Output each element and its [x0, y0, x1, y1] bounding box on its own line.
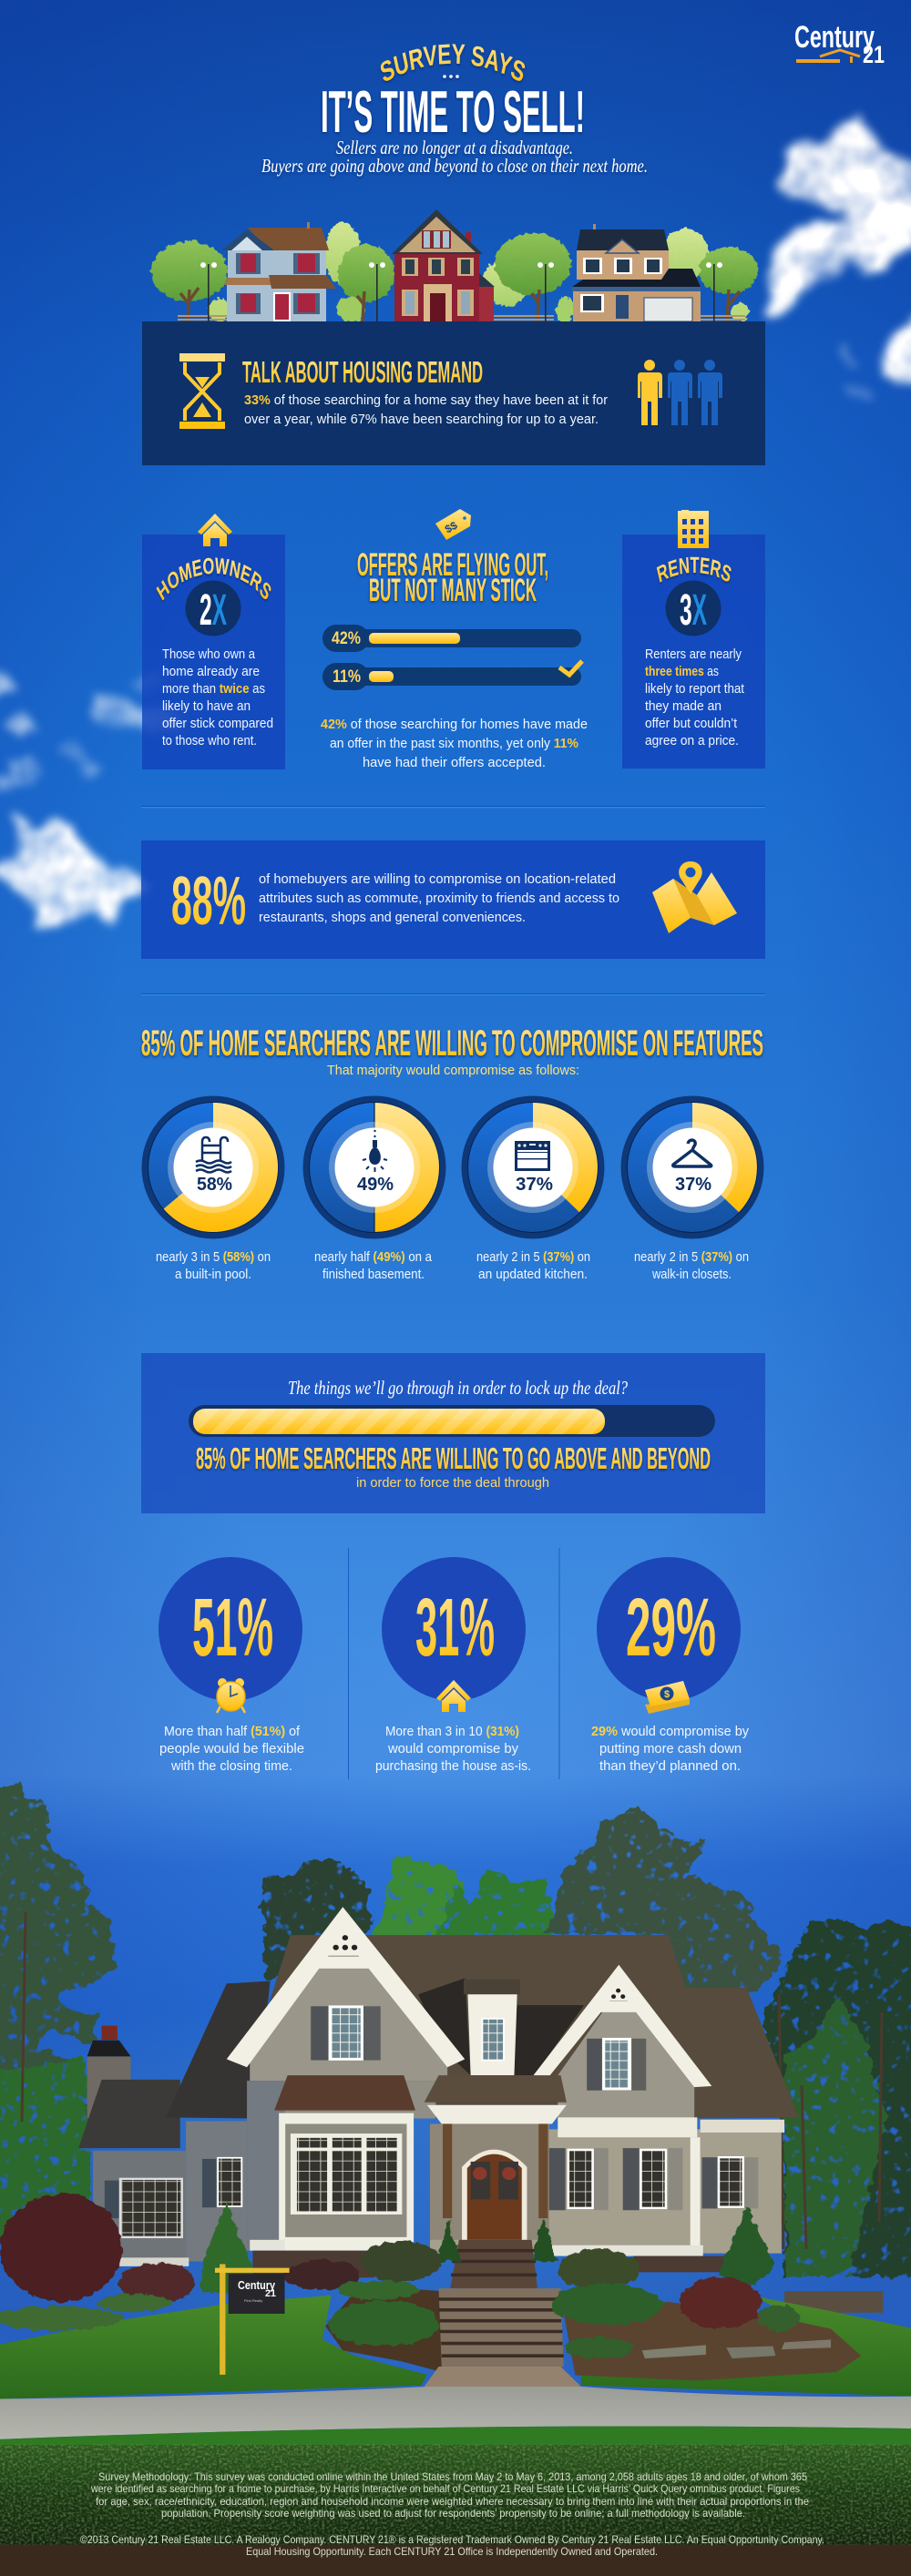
gables [227, 1907, 711, 2087]
icon: cash [645, 1681, 690, 1714]
text block: likely to report that [645, 682, 744, 697]
statistic: 88%: 88% [171, 862, 246, 939]
heading: homeowners: HOMEOWNERS [156, 557, 271, 603]
text block: restaurants, shops and general conveniences. [259, 911, 526, 925]
photo: tree trunks [22, 1912, 882, 2249]
text block: offer but couldn’t [645, 717, 737, 731]
captions: features: nearly 3 in 5 (58%) on [156, 1250, 271, 1265]
icon: oven [515, 1141, 550, 1171]
chimney [87, 2026, 131, 2119]
donut chart: 49% basement [302, 1096, 446, 1238]
subtitle: Buyers are going above and beyond to close on their next home. [261, 155, 648, 177]
text block [321, 718, 588, 770]
tan house [572, 224, 701, 321]
heading: features: That majority would compromise as follows: [327, 1064, 579, 1078]
panel: homeowners [142, 514, 285, 769]
captions: features: an updated kitchen. [478, 1268, 588, 1282]
subtitle: Sellers are no longer at a disadvantage. [336, 137, 573, 158]
text block: likely to have an [162, 699, 251, 714]
footer: copyright: Equal Housing Opportunity. Each CENTURY 21 Office is Independently Owned and Operated. [246, 2545, 658, 2558]
blue house [221, 222, 336, 321]
lower windows [105, 2148, 758, 2237]
stat: 31% as-is [375, 1557, 531, 1774]
donut chart: 37% closets [621, 1096, 763, 1238]
stat: 51% closing time [159, 1557, 304, 1774]
text block: 42% of those searching for homes have made [321, 718, 588, 732]
footer: survey methodology [90, 2470, 809, 2520]
badge: 3X: 3X [680, 586, 707, 635]
panel: housing demand [142, 321, 765, 465]
text block [591, 1725, 750, 1774]
street lamps [200, 262, 722, 321]
heading: survey says: SURVEY SAYS [379, 44, 527, 84]
hedge [0, 2445, 911, 2547]
fences [178, 315, 745, 321]
panel: above and beyond [141, 1353, 765, 1513]
donut chart: 58% pool [142, 1096, 284, 1238]
subtitle [261, 137, 648, 177]
text block: of homebuyers are willing to compromise on location-related [259, 872, 616, 887]
hedge texture [0, 2445, 911, 2547]
panel: offers: OFFERS ARE FLYING OUT, [357, 547, 548, 583]
heading: features [141, 1023, 763, 1078]
text block: three times as [645, 665, 719, 679]
red house [392, 209, 495, 321]
icon: three people [638, 360, 722, 425]
badge: 2X [186, 581, 241, 636]
text block: home already are [162, 665, 260, 679]
icon: price tag: $$ [443, 519, 460, 535]
captions: features [156, 1250, 749, 1282]
text block [244, 393, 608, 427]
text block: agree on a price. [645, 734, 739, 748]
shrubs [0, 2194, 799, 2358]
donut chart: 37% kitchen [461, 1096, 605, 1238]
sign text [238, 2278, 276, 2303]
icon: apartment building [678, 510, 709, 548]
icon: check mark [559, 661, 582, 675]
footer: copyright: ©2013 Century 21 Real Estate LLC. A Realogy Company. CENTURY 21® is a Registered Trademark Owned By Century 21 Real Estate LLC. An Equal Opportunity Company. [80, 2533, 824, 2546]
steps [425, 2240, 581, 2387]
text block: purchasing the house as-is. [375, 1759, 531, 1774]
icon: price tag [435, 509, 471, 540]
icon: house [198, 514, 232, 546]
text block: than they’d planned on. [599, 1759, 741, 1774]
icon: alarm clock [217, 1678, 245, 1713]
donut chart: 37% closets: 37% [675, 1175, 711, 1195]
icon: hourglass [179, 353, 225, 429]
photo: background trees [0, 1785, 911, 2276]
subheading: in order to force the deal through [356, 1475, 549, 1491]
text block: have had their offers accepted. [363, 756, 546, 770]
stat: 51% closing time: 51% [192, 1583, 273, 1674]
icon: pool [196, 1137, 231, 1173]
text block: Those who own a [162, 647, 256, 662]
captions: features: nearly 2 in 5 (37%) on [634, 1250, 749, 1265]
icon: light bulb [363, 1130, 387, 1172]
clouds [0, 107, 911, 929]
text block: More than half (51%) of [164, 1725, 301, 1739]
footer: copyright [80, 2533, 824, 2558]
icon: map with pin [652, 861, 737, 933]
captions: features: a built-in pool. [175, 1268, 251, 1282]
text block: 29% would compromise by [591, 1725, 750, 1739]
dormer [464, 1980, 520, 2075]
text block: more than twice as [162, 682, 265, 697]
stat: 29% cash down [591, 1557, 750, 1774]
text: lead-in: The things we’ll go through in order to lock up the deal? [288, 1377, 628, 1399]
text block [645, 647, 744, 748]
roofs [78, 1935, 799, 2148]
lawn and planting beds [0, 2286, 911, 2399]
bar chart: 42%: 42% [332, 629, 361, 648]
lower lawn [0, 2426, 911, 2456]
panel: offers [321, 509, 588, 770]
footer: survey methodology: for age, sex, race/ethnicity, education, region and household income were weighted where necessary to bring them into line with their actual proportions in the [96, 2495, 809, 2508]
text block: over a year, while 67% have been searching for up to a year. [244, 412, 599, 427]
text block: offer stick compared [162, 717, 273, 731]
footer: survey methodology: Survey Methodology: This survey was conducted online within the United States from May 2 to May 6, 2013, among 2,058 adults ages 18 and older, of whom 365 [98, 2470, 807, 2483]
text block: people would be flexible [159, 1742, 304, 1756]
text block: to those who rent. [162, 734, 257, 748]
captions: features: nearly half (49%) on a [314, 1250, 433, 1265]
text block: putting more cash down [599, 1742, 742, 1756]
logo: Century 21: Century [794, 20, 875, 55]
walls [93, 1935, 782, 2262]
donut chart: 58% pool: 58% [197, 1175, 232, 1195]
bar chart: 11% [322, 661, 582, 690]
badge: 3X [665, 581, 722, 636]
text block [162, 647, 273, 748]
illustration: street of houses [151, 209, 758, 322]
copper roofs and trim [274, 2075, 784, 2251]
photo: house with front yard [0, 1907, 911, 2576]
icon: house [436, 1680, 471, 1712]
text block: with the closing time. [170, 1759, 292, 1774]
text block [375, 1725, 531, 1774]
text block: would compromise by [387, 1742, 519, 1756]
heading: BUT NOT MANY STICK [369, 573, 537, 608]
footer: survey methodology: population. Propensity score weighting was used to adjust for respondents’ propensity to be online; a full methodology is available. [161, 2507, 745, 2520]
heading: TALK ABOUT HOUSING DEMAND [242, 355, 483, 389]
porch and door [430, 2123, 549, 2240]
bar chart: 11%: 11% [333, 667, 361, 687]
bay window [279, 2113, 414, 2251]
progress bar [189, 1405, 715, 1437]
sign text: Century [238, 2278, 276, 2292]
driveway [0, 2387, 911, 2439]
icon: hanger [673, 1140, 711, 1166]
text block: More than 3 in 10 (31%) [385, 1725, 519, 1739]
icon: cash: $ [664, 1689, 670, 1700]
text block: attributes such as commute, proximity to friends and access to [259, 891, 619, 906]
captions: features: nearly 2 in 5 (37%) on [476, 1250, 590, 1265]
captions: features: walk-in closets. [651, 1268, 732, 1282]
panel: location compromise [141, 840, 765, 959]
sign text: First Realty [244, 2298, 262, 2303]
real estate sign [215, 2264, 290, 2375]
stat: 29% cash down: 29% [626, 1583, 716, 1674]
bar chart: 42% [322, 625, 581, 652]
text: IT’S TIME TO SELL! [321, 78, 585, 145]
text block: an offer in the past six months, yet only 11% [330, 737, 578, 751]
logo: Century 21: 21 [863, 41, 885, 68]
panel: renters [622, 510, 765, 769]
badge: 2X: 2X [200, 586, 227, 635]
donut chart: 49% basement: 49% [357, 1175, 394, 1195]
stat: 31% as-is: 31% [415, 1583, 495, 1674]
text block: 33% of those searching for a home say they have been at it for [244, 393, 608, 408]
heading [357, 547, 548, 608]
mulch [0, 2545, 911, 2576]
text block: Renters are nearly [645, 647, 742, 662]
donut chart: 37% kitchen: 37% [516, 1175, 553, 1195]
sign text: 21 [265, 2288, 276, 2299]
captions: features: finished basement. [322, 1268, 425, 1282]
upper windows [311, 2006, 646, 2091]
text block [159, 1725, 304, 1774]
text block: they made an [645, 699, 722, 714]
trees [151, 222, 758, 322]
footer: survey methodology: were identified as searching for a home to purchase, by Harris Interactive on behalf of Century 21 Real Estate LLC via Harris’ Quick Query omnibus product. Figures [90, 2482, 800, 2495]
foundation [93, 2240, 883, 2313]
heading: renters: RENTERS [656, 557, 732, 585]
logo: Century 21 [794, 20, 885, 68]
text block [259, 872, 619, 925]
